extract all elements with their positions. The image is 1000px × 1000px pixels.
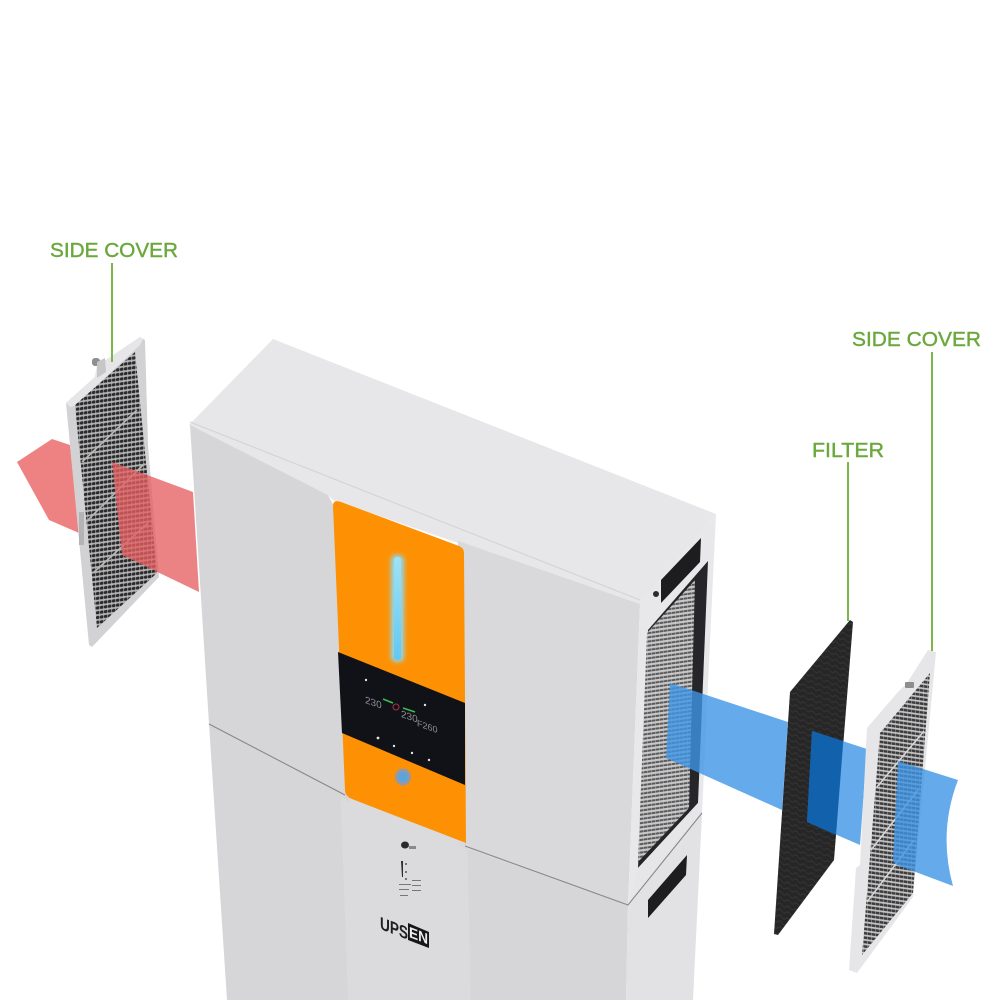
icon: power button bbox=[395, 768, 411, 786]
side opening frame bbox=[638, 561, 708, 868]
leader line: left side cover bbox=[111, 263, 113, 362]
label: right side cover: SIDE COVER bbox=[852, 328, 981, 351]
panel: main unit upper front left bbox=[190, 425, 350, 802]
leader line: filter bbox=[847, 462, 849, 621]
icon: cover thumb screw bbox=[905, 682, 914, 688]
cover ribs bbox=[82, 410, 148, 573]
display: black LCD band: 230 bbox=[401, 709, 418, 726]
panel: left side cover bbox=[66, 337, 159, 647]
logo: UPSEN: EN bbox=[409, 924, 428, 948]
display: black LCD band bbox=[338, 652, 465, 785]
icon: lower handle bbox=[648, 855, 687, 918]
panel: blue airflow arrow head bbox=[893, 761, 958, 886]
panel: main unit upper front right bbox=[458, 541, 640, 905]
icon: status indicators bbox=[399, 842, 421, 896]
panel: left airflow arrow tail (behind cover) bbox=[17, 439, 79, 533]
display: black LCD band: 230 bbox=[365, 695, 382, 712]
panel: main unit top face bbox=[189, 339, 716, 604]
lower bracket bbox=[628, 803, 702, 905]
LCD touch buttons bbox=[365, 679, 430, 761]
side filter mesh bbox=[638, 580, 695, 862]
panel: main unit right side bbox=[628, 514, 716, 918]
panel: main unit lower body bbox=[209, 724, 702, 1000]
icon: upper handle bbox=[661, 538, 701, 603]
icon: LED light bar bbox=[391, 555, 404, 662]
label: left side cover: SIDE COVER bbox=[50, 239, 178, 262]
panel: blue airflow behind filter bbox=[666, 683, 788, 810]
seam between modules bbox=[209, 724, 702, 905]
lid seam bbox=[190, 422, 640, 600]
label: filter: FILTER bbox=[812, 439, 884, 462]
panel: left airflow arrow head (in front of cover) bbox=[112, 462, 199, 592]
panel: right side cover bbox=[849, 650, 936, 973]
logo: UPSEN: UPS bbox=[380, 913, 408, 944]
leader line: right side cover bbox=[931, 352, 933, 651]
LCD green indicators bbox=[383, 699, 415, 712]
dark overlap on filter bbox=[807, 731, 843, 835]
display: black LCD band: F260 bbox=[417, 718, 437, 735]
panel: orange front panel bbox=[333, 501, 466, 843]
panel: blue airflow in front of filter bbox=[807, 731, 867, 845]
cover ribs bbox=[867, 731, 924, 902]
icon: cover thumb screw bbox=[92, 358, 106, 378]
panel: filter bbox=[774, 620, 853, 935]
